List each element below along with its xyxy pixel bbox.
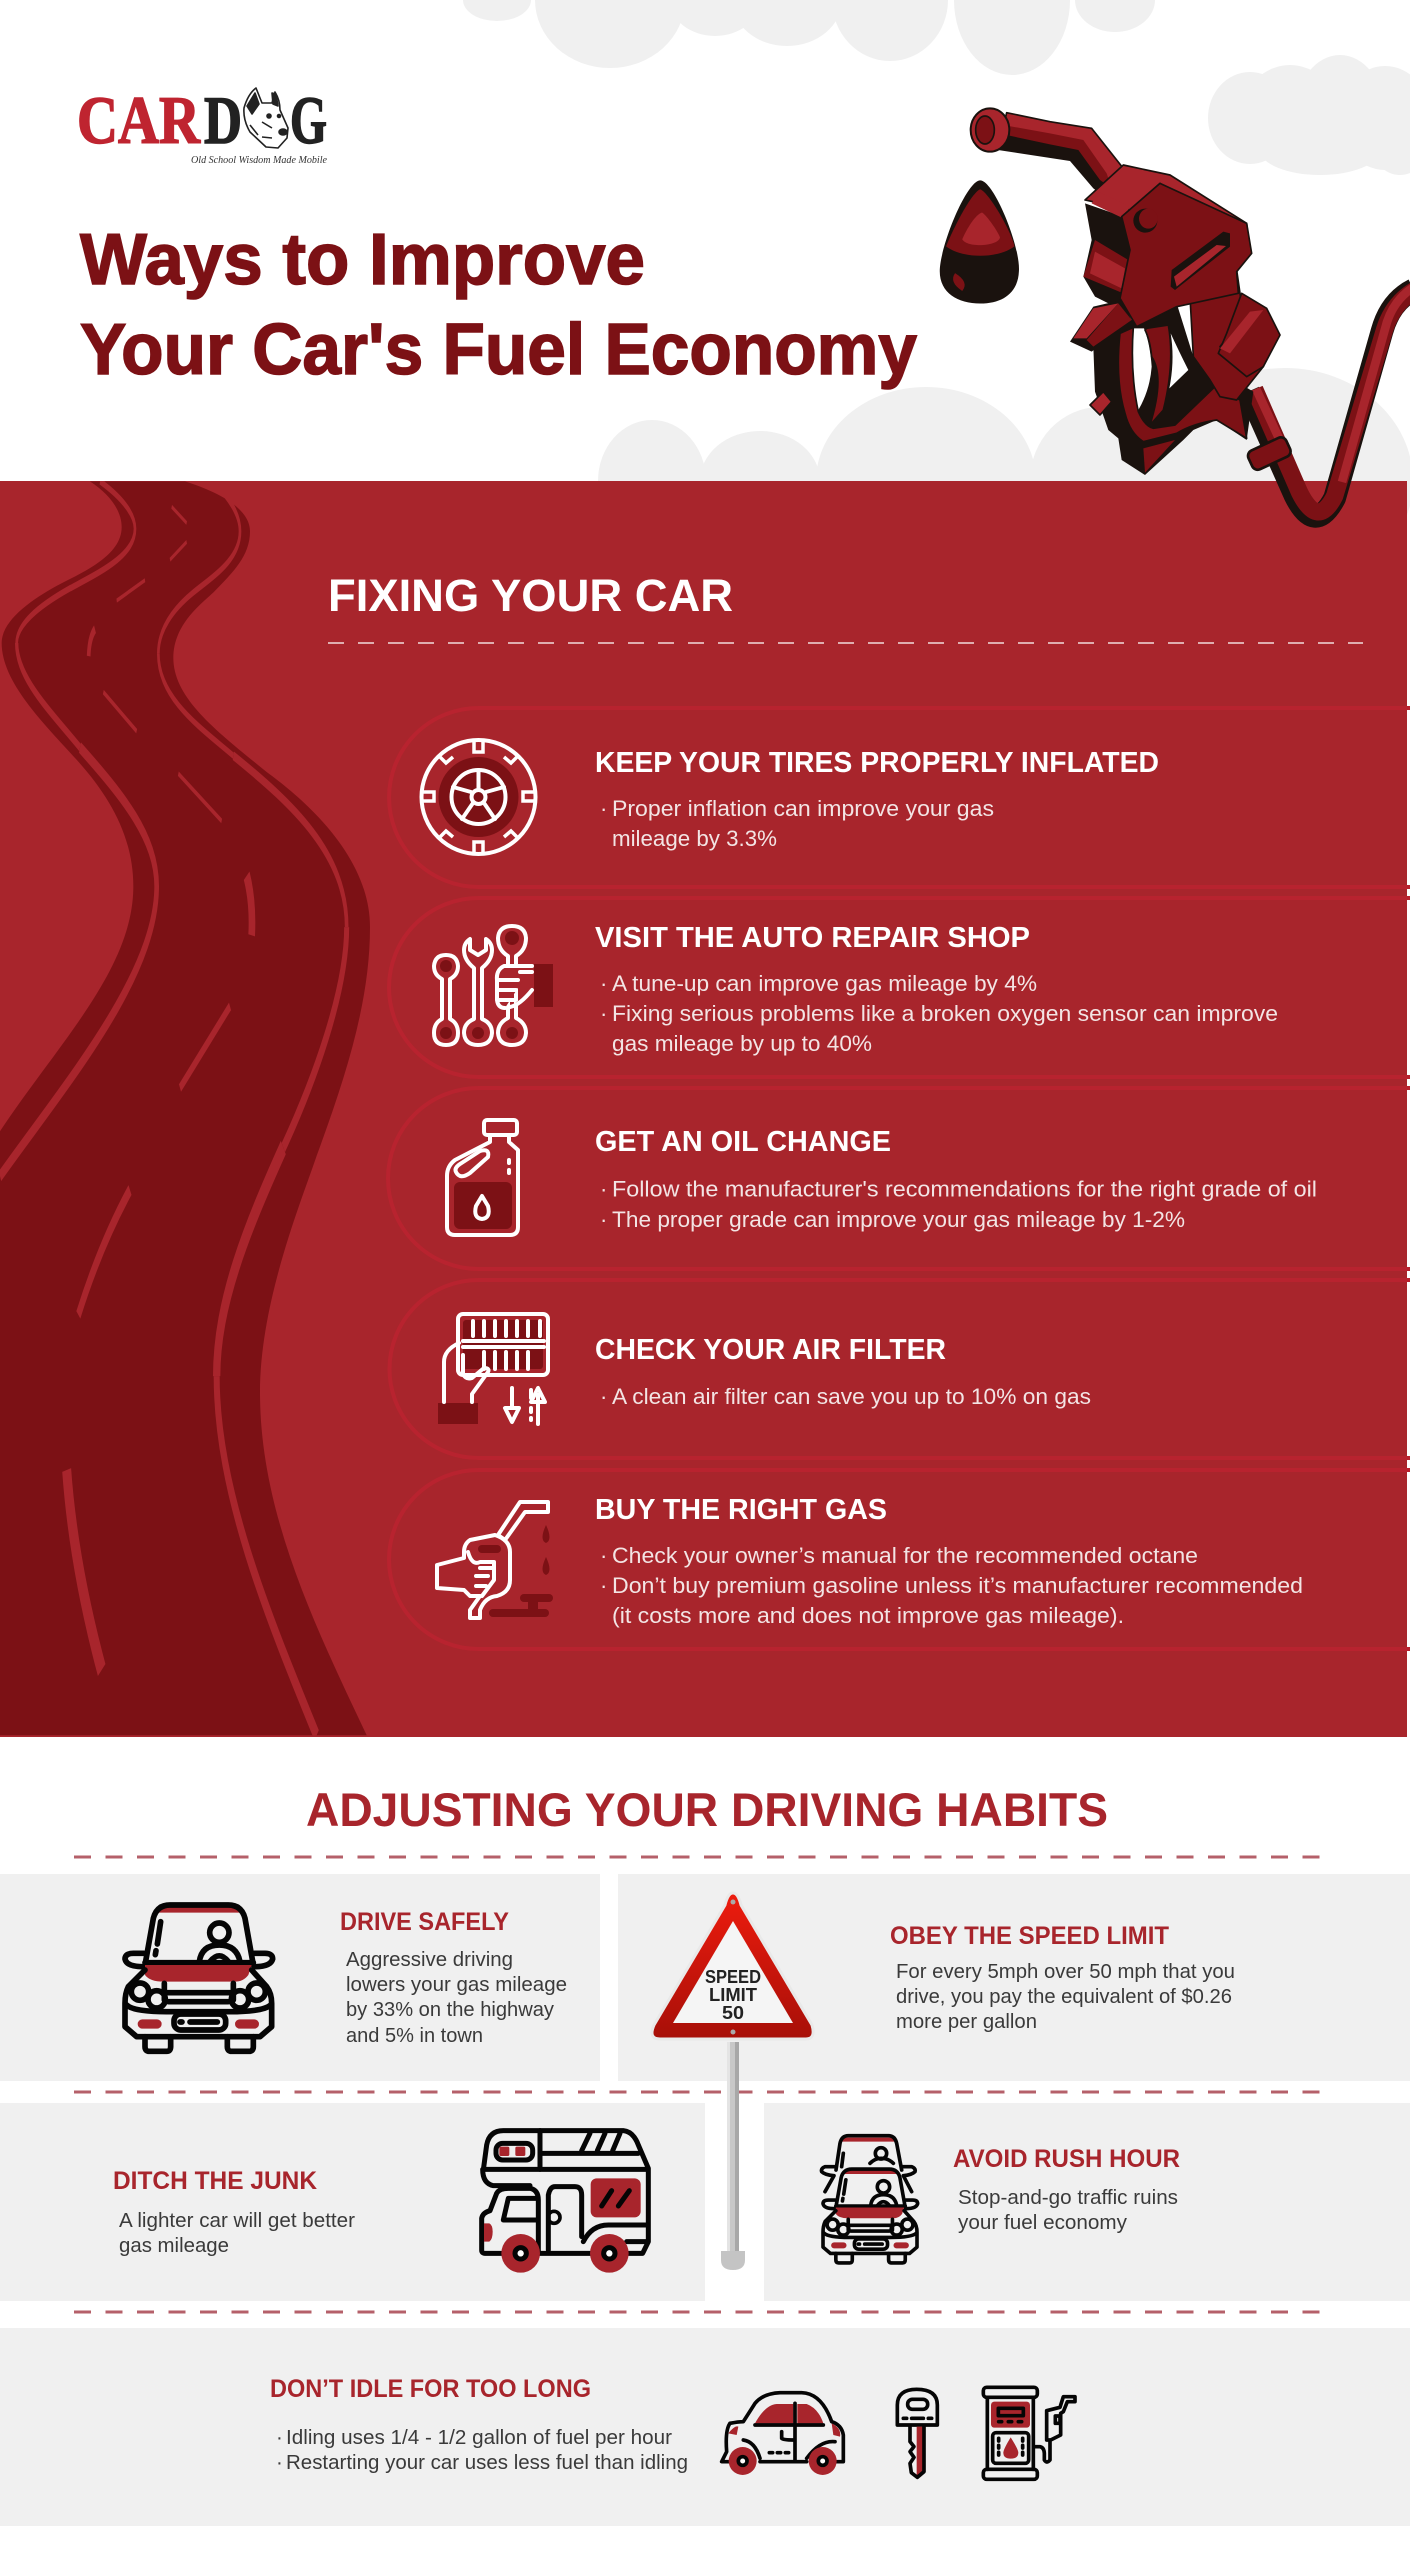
body text: drive, you pay the equivalent of $0.26 bbox=[896, 1985, 1232, 2008]
road bbox=[0, 481, 370, 1735]
main handle bbox=[1190, 270, 1263, 400]
sign triangle bbox=[652, 1893, 813, 2039]
title: Ways to Improve bbox=[80, 220, 645, 300]
body text: Check your owner’s manual for the recommended octane bbox=[612, 1543, 1198, 1568]
body text: Idling uses 1/4 - 1/2 gallon of fuel per hour bbox=[286, 2426, 672, 2449]
icon: tire bbox=[422, 740, 536, 854]
panel: ditch the junk bbox=[0, 2103, 705, 2301]
body text bbox=[119, 2209, 355, 2257]
panel: don't idle bbox=[0, 2328, 1410, 2526]
icon: traffic cars bbox=[821, 2136, 918, 2263]
icon: air filter bbox=[438, 1314, 548, 1424]
icon: fuel drop bbox=[940, 180, 1019, 304]
body text: Stop-and-go traffic ruins bbox=[958, 2186, 1178, 2209]
icon: oil bottle bbox=[447, 1120, 518, 1235]
panel: auto repair bbox=[389, 898, 1410, 1077]
trigger guard bbox=[1093, 303, 1253, 475]
body text: · bbox=[600, 1176, 607, 1202]
icon: gas nozzle bbox=[437, 1502, 553, 1618]
body text: · bbox=[600, 1384, 607, 1409]
panel: oil change bbox=[388, 1088, 1410, 1269]
heading: BUY THE RIGHT GAS bbox=[595, 1494, 887, 1526]
body text: A clean air filter can save you up to 10% on gas bbox=[612, 1384, 1091, 1409]
heading: GET AN OIL CHANGE bbox=[595, 1126, 891, 1158]
body text: Proper inflation can improve your gas bbox=[612, 796, 994, 821]
guard plate bbox=[1218, 293, 1280, 377]
logo tagline: Old School Wisdom Made Mobile bbox=[191, 155, 327, 166]
body text: gas mileage by up to 40% bbox=[612, 1031, 872, 1056]
sign text bbox=[705, 1967, 761, 2023]
heading: CHECK YOUR AIR FILTER bbox=[595, 1334, 946, 1366]
heading: DRIVE SAFELY bbox=[340, 1908, 509, 1936]
title bbox=[80, 220, 917, 390]
body text: · bbox=[276, 2426, 283, 2449]
body text bbox=[958, 2186, 1178, 2234]
panel: right gas bbox=[389, 1470, 1410, 1649]
body text: Aggressive driving bbox=[346, 1948, 513, 1971]
body text bbox=[896, 1960, 1235, 2033]
body text: A lighter car will get better bbox=[119, 2209, 355, 2232]
body text: The proper grade can improve your gas mileage by 1-2% bbox=[612, 1207, 1185, 1232]
logo dog head bbox=[244, 88, 288, 148]
heading: OBEY THE SPEED LIMIT bbox=[890, 1922, 1169, 1950]
body text: · bbox=[600, 1543, 607, 1568]
section heading: ADJUSTING YOUR DRIVING HABITS bbox=[306, 1783, 1108, 1836]
logo wordmark D: D bbox=[204, 82, 242, 158]
heading: DITCH THE JUNK bbox=[113, 2167, 317, 2195]
spout bbox=[998, 113, 1130, 203]
icon: camper van bbox=[482, 2131, 648, 2273]
body text: Restarting your car uses less fuel than idling bbox=[286, 2451, 688, 2474]
body text: For every 5mph over 50 mph that you bbox=[896, 1960, 1235, 1983]
clouds bbox=[463, 0, 1410, 594]
body text: · bbox=[276, 2451, 283, 2474]
icon: key bbox=[897, 2389, 937, 2477]
body text: (it costs more and does not improve gas mileage). bbox=[612, 1603, 1124, 1628]
body text: · bbox=[600, 1001, 607, 1026]
body text: and 5% in town bbox=[346, 2024, 483, 2047]
body text bbox=[600, 1543, 1303, 1628]
left flap bbox=[1070, 300, 1132, 352]
body text: Follow the manufacturer's recommendations for the right grade of oil bbox=[612, 1176, 1317, 1202]
body text: your fuel economy bbox=[958, 2211, 1128, 2234]
panel: drive safely bbox=[0, 1874, 600, 2081]
body text: gas mileage bbox=[119, 2234, 229, 2257]
section heading: FIXING YOUR CAR bbox=[328, 570, 733, 621]
icon: small car bbox=[722, 2393, 843, 2475]
body text: · bbox=[600, 1207, 607, 1232]
body text: · bbox=[600, 796, 607, 821]
body text bbox=[346, 1948, 567, 2047]
icon: wrenches bbox=[434, 926, 553, 1045]
logo wordmark G: G bbox=[290, 82, 327, 158]
heading: KEEP YOUR TIRES PROPERLY INFLATED bbox=[595, 747, 1159, 779]
sign text: LIMIT bbox=[709, 1985, 757, 2005]
hose bbox=[1249, 285, 1410, 516]
icon: fuel pump bbox=[983, 2387, 1075, 2479]
body text bbox=[276, 2426, 688, 2474]
panel: fixing your car bbox=[0, 481, 1410, 1737]
nozzle body back bbox=[1085, 165, 1250, 253]
panel: obey the speed limit bbox=[618, 1874, 1410, 2081]
body text bbox=[600, 971, 1278, 1056]
sign text: 50 bbox=[722, 2003, 744, 2023]
sign text: SPEED bbox=[705, 1967, 761, 1987]
heading: VISIT THE AUTO REPAIR SHOP bbox=[595, 922, 1030, 954]
body text: · bbox=[600, 971, 607, 996]
sign post bbox=[721, 2042, 745, 2270]
heading: AVOID RUSH HOUR bbox=[953, 2145, 1180, 2173]
icon: speed limit sign bbox=[652, 1893, 813, 2270]
icon: car front bbox=[125, 1905, 273, 2051]
body text: mileage by 3.3% bbox=[612, 826, 777, 851]
icon: fuel nozzle with hose bbox=[971, 108, 1410, 516]
body text: lowers your gas mileage bbox=[346, 1973, 567, 1996]
heading: DON’T IDLE FOR TOO LONG bbox=[270, 2375, 591, 2403]
body text: A tune-up can improve gas mileage by 4% bbox=[612, 971, 1037, 996]
main body front bbox=[1120, 183, 1252, 327]
panel: air filter bbox=[390, 1280, 1410, 1458]
body text bbox=[600, 796, 994, 851]
body text: Don’t buy premium gasoline unless it’s manufacturer recommended bbox=[612, 1573, 1303, 1598]
body text: · bbox=[600, 1573, 607, 1598]
body text: Fixing serious problems like a broken oxygen sensor can improve bbox=[612, 1001, 1278, 1026]
logo wordmark CAR: CAR bbox=[77, 82, 201, 158]
panel: avoid rush hour bbox=[764, 2103, 1410, 2301]
title: Your Car's Fuel Economy bbox=[80, 310, 917, 390]
body text bbox=[600, 1176, 1317, 1232]
body text: more per gallon bbox=[896, 2010, 1037, 2033]
panel: tires bbox=[389, 708, 1410, 887]
logo bbox=[77, 82, 327, 166]
body text: by 33% on the highway bbox=[346, 1998, 555, 2021]
